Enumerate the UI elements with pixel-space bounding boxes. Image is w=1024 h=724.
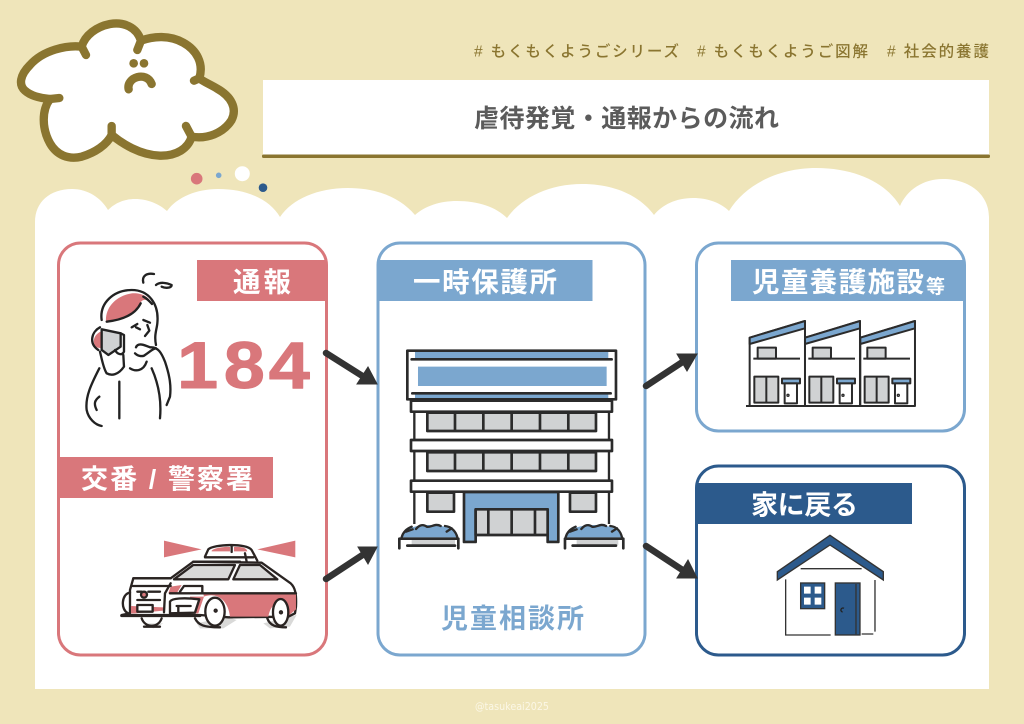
arrow: police to shelter bbox=[326, 547, 377, 579]
panel: white cloud background bbox=[35, 168, 989, 689]
icon: worried person on phone bbox=[86, 274, 172, 426]
house 1 bbox=[750, 321, 805, 406]
panel: reporting bbox=[58, 243, 327, 655]
number 184: 4 bbox=[269, 329, 310, 402]
icon: house bbox=[777, 535, 883, 635]
arrow: shelter to facilities bbox=[646, 354, 697, 386]
heading: return home: 家に戻る bbox=[751, 490, 858, 520]
house 2 bbox=[805, 321, 860, 406]
heading: foster care facilities: 等 bbox=[926, 276, 945, 298]
icon: worried cloud mascot bbox=[21, 23, 234, 158]
icon: police car bbox=[122, 541, 297, 628]
hashtags bbox=[474, 42, 989, 60]
heading: police box / police station: 交番 / 警察署 bbox=[81, 464, 253, 494]
number 184: 8 bbox=[224, 329, 265, 402]
arrow: report to shelter bbox=[326, 353, 377, 384]
icon: row of houses bbox=[746, 321, 915, 406]
heading: return home bbox=[697, 483, 912, 524]
title band bbox=[262, 80, 990, 158]
arrow: shelter to home bbox=[646, 546, 697, 578]
panel: foster care facilities bbox=[696, 243, 965, 431]
house 3 bbox=[860, 321, 915, 406]
heading: report bbox=[197, 260, 327, 301]
number 184: 1 bbox=[177, 329, 218, 402]
credit: @tasukeai2025 bbox=[475, 701, 549, 713]
icon: mascot frown bbox=[128, 77, 152, 89]
label: child guidance center: 児童相談所 bbox=[441, 604, 584, 634]
panel: returning home bbox=[696, 466, 964, 655]
hashtags: # 社会的養護 bbox=[887, 42, 989, 60]
icon: mascot eyes bbox=[129, 59, 148, 68]
heading: foster care facilities bbox=[731, 260, 965, 301]
title: 虐待発覚・通報からの流れ bbox=[474, 105, 779, 133]
heading: police box / police station bbox=[58, 457, 273, 498]
panel: child guidance center bbox=[378, 243, 645, 655]
heading: temporary shelter: 一時保護所 bbox=[413, 266, 557, 298]
heading: temporary shelter bbox=[378, 260, 592, 301]
heading: foster care facilities: 児童養護施設 bbox=[752, 266, 924, 298]
icon: building bbox=[399, 351, 625, 548]
decorative thought dots bbox=[191, 166, 267, 192]
hashtags: # もくもくようごシリーズ bbox=[474, 42, 679, 60]
hashtags: # もくもくようご図解 bbox=[697, 42, 868, 60]
heading: report: 通報 bbox=[233, 266, 292, 298]
